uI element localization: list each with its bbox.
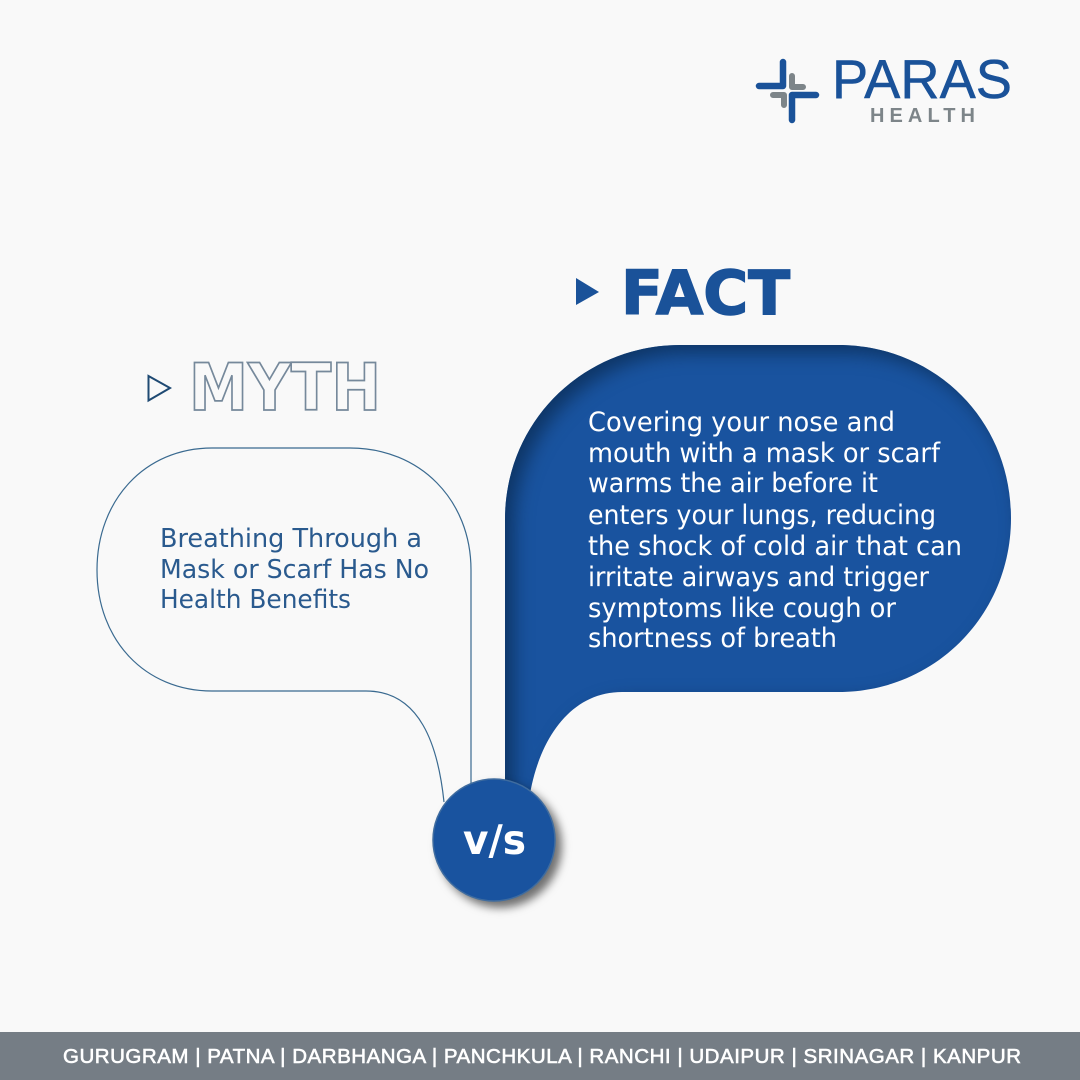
- fact text: warms the air before it: [588, 468, 878, 499]
- logo wordmark: PARAS: [832, 48, 1012, 110]
- myth text: [160, 524, 429, 615]
- panel: myth bubble: [97, 448, 471, 802]
- icon: medical cross: [759, 62, 816, 120]
- icon: fact triangle: [576, 278, 599, 305]
- footer bar: locations: GURUGRAM | PATNA | DARBHANGA | PANCHKULA | RANCHI | UDAIPUR | SRINAGAR | KANPUR: [63, 1045, 1021, 1068]
- heading: myth: MYTH: [189, 351, 381, 426]
- badge: v/s: [433, 779, 555, 901]
- fact text: enters your lungs, reducing: [588, 500, 936, 531]
- footer bar: locations: [0, 1032, 1080, 1080]
- myth text: Breathing Through a: [160, 524, 422, 554]
- panel: fact bubble: [505, 345, 1011, 800]
- fact text: [588, 407, 962, 654]
- fact text: mouth with a mask or scarf: [588, 438, 941, 469]
- badge: v/s: v/s: [463, 816, 526, 864]
- fact text: the shock of cold air that can: [588, 531, 962, 562]
- myth text: Mask or Scarf Has No: [160, 555, 429, 585]
- fact text: irritate airways and trigger: [588, 562, 929, 593]
- fact text: shortness of breath: [588, 623, 837, 654]
- logo: Paras Health: [759, 48, 1012, 127]
- heading: fact: FACT: [621, 258, 790, 329]
- myth text: Health Benefits: [160, 585, 351, 615]
- logo subtitle: HEALTH: [870, 105, 975, 127]
- icon: myth triangle: [148, 376, 170, 400]
- fact text: symptoms like cough or: [588, 593, 896, 624]
- fact text: Covering your nose and: [588, 407, 895, 438]
